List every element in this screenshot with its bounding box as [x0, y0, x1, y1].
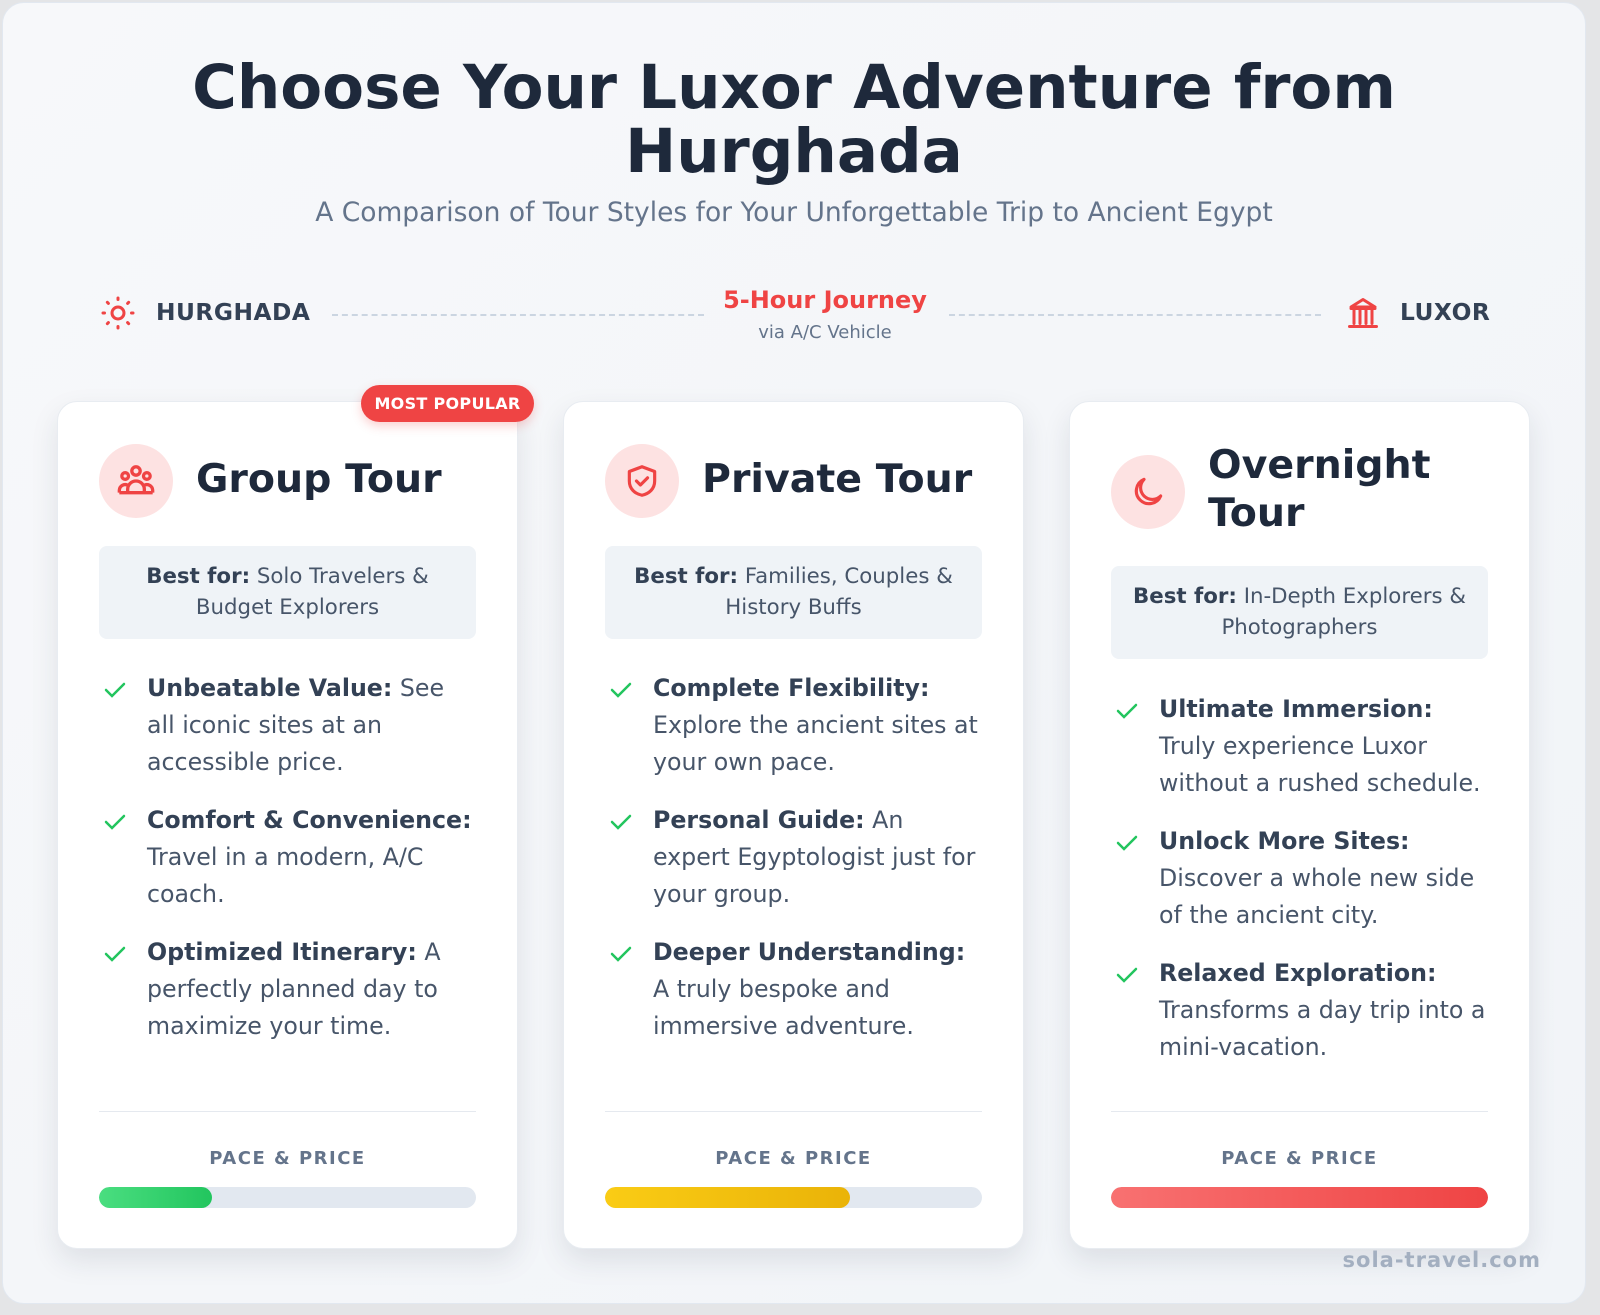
benefits list: Explore the ancient sites at [653, 711, 978, 739]
benefits list: all iconic sites at an [147, 711, 382, 739]
benefits list: A truly bespoke and [653, 975, 890, 1003]
benefits list: mini-vacation. [1159, 1033, 1327, 1061]
pace label: PACE & PRICE [209, 1148, 366, 1169]
benefits list: of the ancient city. [1159, 901, 1378, 929]
icon: shield [605, 444, 679, 518]
card title: Tour [1208, 490, 1304, 536]
card title: Overnight [1208, 442, 1431, 488]
benefits list: maximize your time. [147, 1012, 391, 1040]
watermark: sola-travel.com [1343, 1248, 1541, 1272]
journey label: via A/C Vehicle [758, 322, 892, 343]
benefits list: your own pace. [653, 748, 835, 776]
benefits list: Personal Guide: An [653, 806, 903, 834]
benefits list: Complete Flexibility: [653, 674, 929, 702]
benefits list: perfectly planned day to [147, 975, 438, 1003]
badge: most popular [361, 385, 534, 422]
label: Hurghada: HURGHADA [156, 299, 310, 326]
card: overnight tour [1069, 401, 1530, 1249]
benefits list: Discover a whole new side [1159, 864, 1474, 892]
title [192, 52, 1396, 187]
pace label: PACE & PRICE [1221, 1148, 1378, 1169]
benefits list [1116, 695, 1485, 1061]
benefits list [104, 674, 472, 1040]
benefits list: Unbeatable Value: See [147, 674, 444, 702]
benefits list: accessible price. [147, 748, 344, 776]
icon: temple [1348, 298, 1378, 328]
journey label: 5-Hour Journey [723, 286, 927, 314]
icon: group [99, 444, 173, 518]
benefits list: Deeper Understanding: [653, 938, 965, 966]
journey row [102, 286, 1490, 343]
subtitle: A Comparison of Tour Styles for Your Unforgettable Trip to Ancient Egypt [315, 197, 1273, 228]
best for: Budget Explorers [196, 595, 379, 620]
best for: Best for: Solo Travelers & [146, 564, 429, 589]
benefits list: Travel in a modern, A/C [147, 843, 423, 871]
benefits list: your group. [653, 880, 790, 908]
best for [1111, 566, 1488, 659]
title: Hurghada [625, 116, 963, 187]
icon: moon [1111, 455, 1185, 529]
benefits list: Ultimate Immersion: [1159, 695, 1433, 723]
benefits list: Unlock More Sites: [1159, 827, 1410, 855]
best for: Best for: In-Depth Explorers & [1133, 584, 1466, 609]
benefits list: expert Egyptologist just for [653, 843, 975, 871]
benefits list: immersive adventure. [653, 1012, 914, 1040]
best for: History Buffs [725, 595, 862, 620]
card title: Group Tour [196, 456, 442, 502]
benefits list: without a rushed schedule. [1159, 769, 1481, 797]
bar: pace green [99, 1187, 476, 1208]
benefits list: Transforms a day trip into a [1159, 996, 1485, 1024]
benefits list: coach. [147, 880, 225, 908]
best for [99, 546, 476, 639]
best for: Photographers [1221, 615, 1378, 640]
badge: most popular: MOST POPULAR [374, 394, 521, 413]
benefits list: Comfort & Convenience: [147, 806, 472, 834]
pace label: PACE & PRICE [715, 1148, 872, 1169]
bar: pace yellow [605, 1187, 982, 1208]
card title [1208, 442, 1431, 536]
benefits list: Truly experience Luxor [1159, 732, 1427, 760]
best for: Best for: Families, Couples & [634, 564, 953, 589]
benefits list [610, 674, 978, 1040]
title: Choose Your Luxor Adventure from [192, 52, 1396, 123]
benefits list: Relaxed Exploration: [1159, 959, 1436, 987]
card title: Private Tour [702, 456, 972, 502]
bar: pace red [1111, 1187, 1488, 1208]
label: Luxor: LUXOR [1400, 299, 1490, 326]
journey label [723, 286, 927, 343]
card: private tour [563, 401, 1024, 1249]
card: group tour [57, 401, 518, 1249]
icon: sun [102, 296, 134, 330]
best for [605, 546, 982, 639]
benefits list: Optimized Itinerary: A [147, 938, 441, 966]
